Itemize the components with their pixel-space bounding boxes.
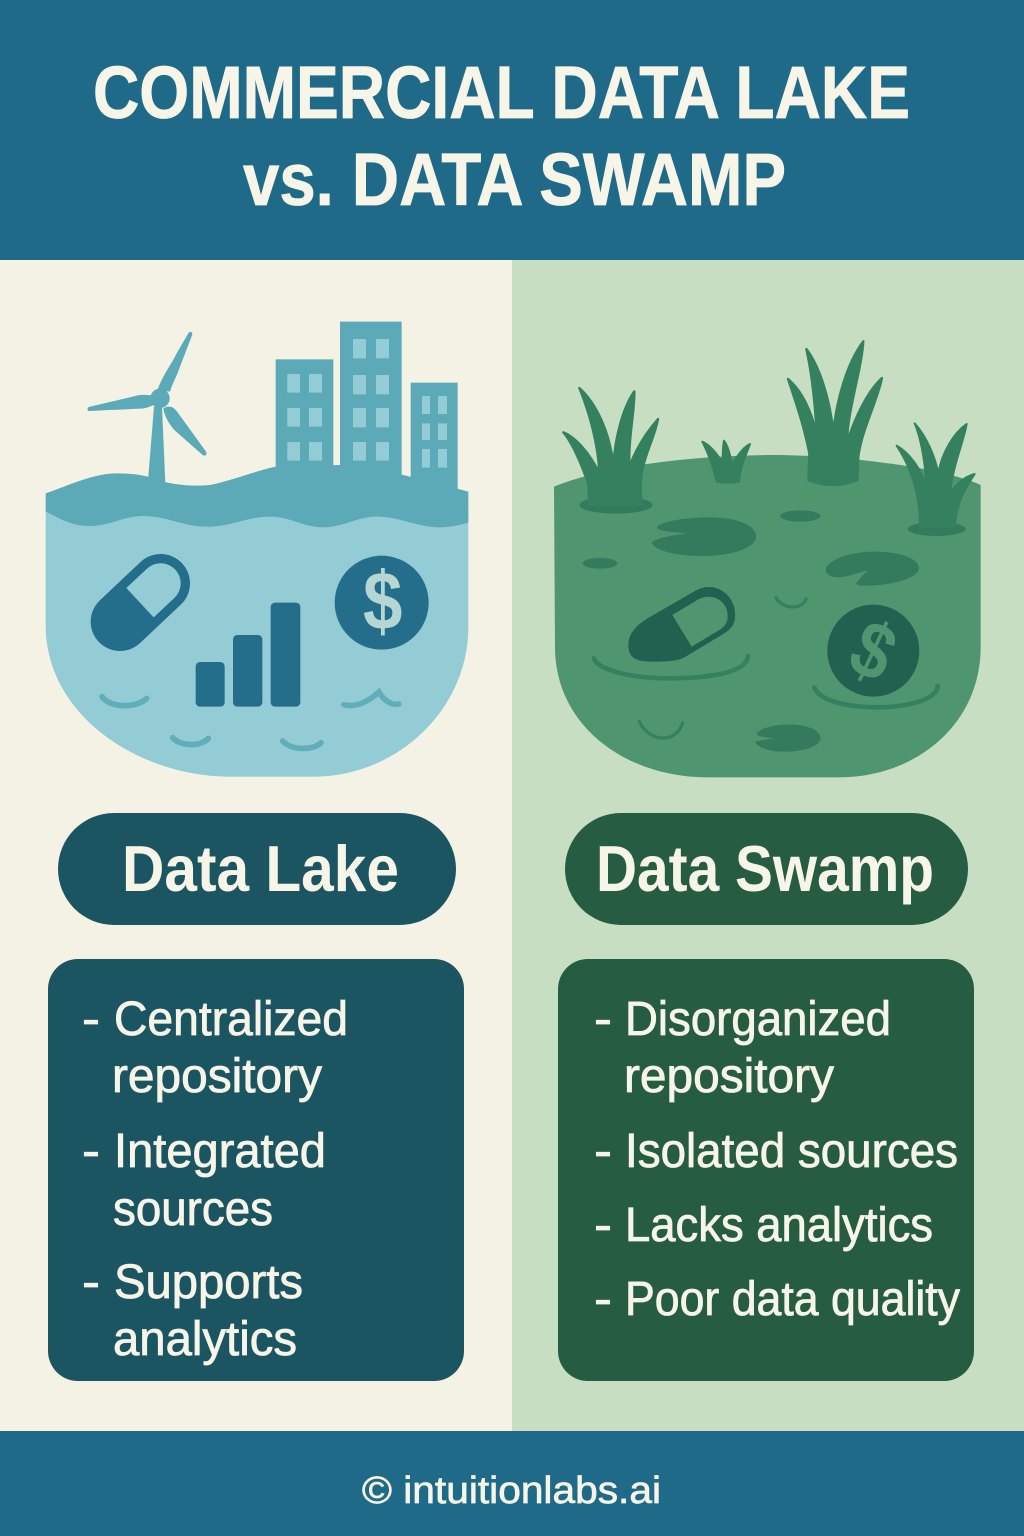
icon: dollar coin: $: [363, 555, 402, 648]
panel: data swamp background: [512, 260, 1024, 1431]
illustration: data lake: [46, 322, 468, 777]
icon: capsule: [120, 563, 181, 622]
text panel: data lake features: -: [82, 993, 100, 1046]
text panel: data swamp features: -: [594, 1199, 612, 1252]
text panel: data swamp features: repository: [624, 1050, 834, 1103]
text panel: data swamp features: -: [594, 1273, 612, 1326]
text panel: data swamp features: Poor data quality: [625, 1273, 960, 1326]
text panel: data swamp features: Lacks analytics: [625, 1199, 933, 1252]
illustration: data swamp: [554, 341, 981, 777]
reed clump 2: [702, 441, 750, 483]
reed clump 1: [563, 388, 658, 514]
text panel: data swamp features: Disorganized: [625, 993, 891, 1046]
icon: wind turbine: [88, 332, 206, 483]
footer: © intuitionlabs.ai: [362, 1470, 661, 1512]
text panel: data lake features: repository: [112, 1050, 322, 1103]
text panel: data swamp features: Isolated sources: [625, 1125, 958, 1178]
text panel: data swamp features: -: [594, 1125, 612, 1178]
text panel: data lake features: -: [82, 1256, 100, 1309]
heading pill: Data Swamp: Data Swamp: [596, 832, 934, 905]
header banner: [0, 0, 1024, 260]
heading pill: Data Lake: [58, 813, 456, 925]
heading pill: Data Swamp: [565, 813, 968, 925]
title line 2: vs. DATA SWAMP: [243, 138, 786, 221]
text panel: data swamp features: -: [594, 993, 612, 1046]
icon: sinking dollar coin: $: [837, 601, 910, 699]
text panel: data lake features: analytics: [113, 1313, 297, 1366]
text panel: data lake features: -: [82, 1125, 100, 1178]
icon: city buildings: [276, 322, 458, 492]
footer: [0, 1431, 1024, 1536]
panel: data lake background: [0, 260, 512, 1431]
swamp ripples: [594, 597, 938, 738]
water ripples: [102, 692, 399, 748]
reed clump 4: [897, 423, 975, 536]
reed clump 3: [788, 341, 882, 485]
title line 1: COMMERCIAL DATA LAKE: [93, 51, 910, 134]
text panel: data swamp features: [558, 959, 974, 1381]
text panel: data lake features: Supports: [114, 1256, 303, 1309]
lily pads: [583, 510, 919, 752]
text panel: data lake features: sources: [113, 1183, 273, 1236]
text panel: data lake features: Centralized: [114, 993, 348, 1046]
water body: [46, 510, 468, 777]
shoreline land: [46, 465, 468, 527]
swamp body: [554, 455, 981, 777]
heading pill: Data Lake: Data Lake: [122, 832, 399, 905]
bar chart: [196, 603, 300, 707]
text panel: data lake features: [48, 959, 464, 1381]
icon: sinking capsule: [628, 587, 735, 662]
icon: dollar coin: [335, 555, 429, 650]
text panel: data lake features: Integrated: [114, 1125, 326, 1178]
